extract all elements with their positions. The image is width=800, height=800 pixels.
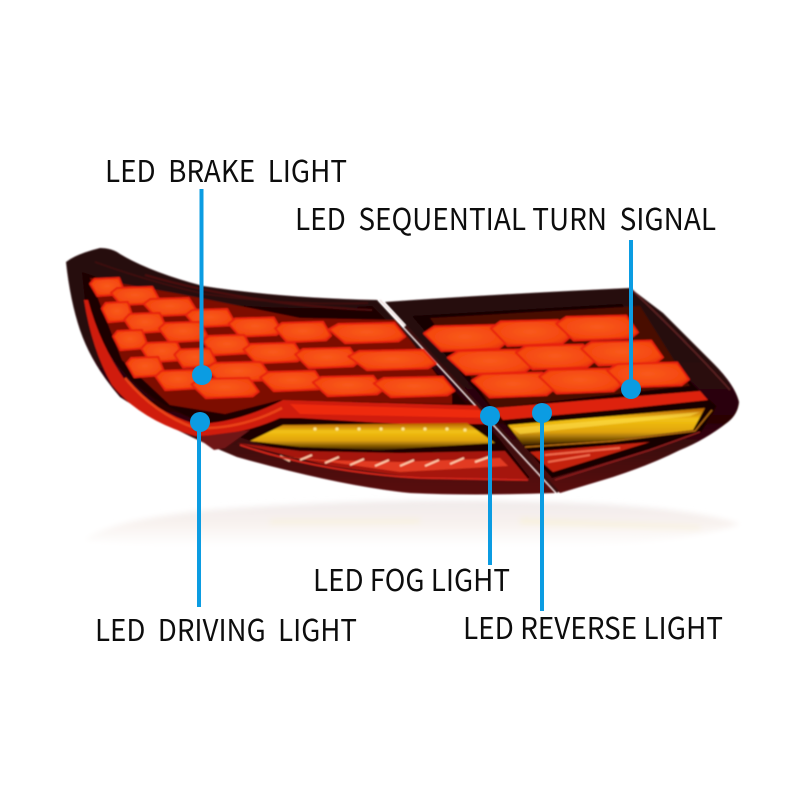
label: LED reverse light: LED REVERSE LIGHT: [463, 604, 723, 648]
left lamp: red glow behind cells: [90, 278, 452, 414]
label: LED brake light: LED BRAKE LIGHT: [105, 147, 347, 191]
right lamp: housing: [380, 288, 739, 493]
callout lines: [190, 189, 641, 611]
right lamp: amber reverse light strip: [508, 408, 712, 447]
tail light assembly: [66, 248, 739, 494]
label: LED driving light: LED DRIVING LIGHT: [95, 606, 357, 650]
floor reflection: [84, 501, 740, 546]
callout: driving light pointer: [190, 412, 210, 607]
right lamp: LED sequential turn signal cells: [424, 316, 689, 397]
callout: fog light pointer: [480, 406, 500, 565]
right lamp: red reverse band: [493, 391, 708, 420]
callout: reverse light pointer: [532, 403, 552, 611]
left lamp: housing: [66, 248, 555, 494]
left lamp: amber fog light strip: [250, 423, 495, 450]
right lamp: lower red wedge: [530, 432, 700, 480]
left lamp: lower red strip: [237, 443, 528, 480]
left lamp: LED brake light cells: [90, 278, 454, 398]
callout: brake light pointer: [192, 189, 212, 385]
right lamp: cell shadow ledges: [430, 306, 690, 408]
left lamp: driving light band: [84, 300, 500, 450]
callout: turn signal pointer: [621, 240, 641, 399]
label: LED sequential turn signal: LED SEQUENTIAL TURN SIGNAL: [295, 195, 716, 239]
label: LED fog light: LED FOG LIGHT: [313, 556, 510, 600]
